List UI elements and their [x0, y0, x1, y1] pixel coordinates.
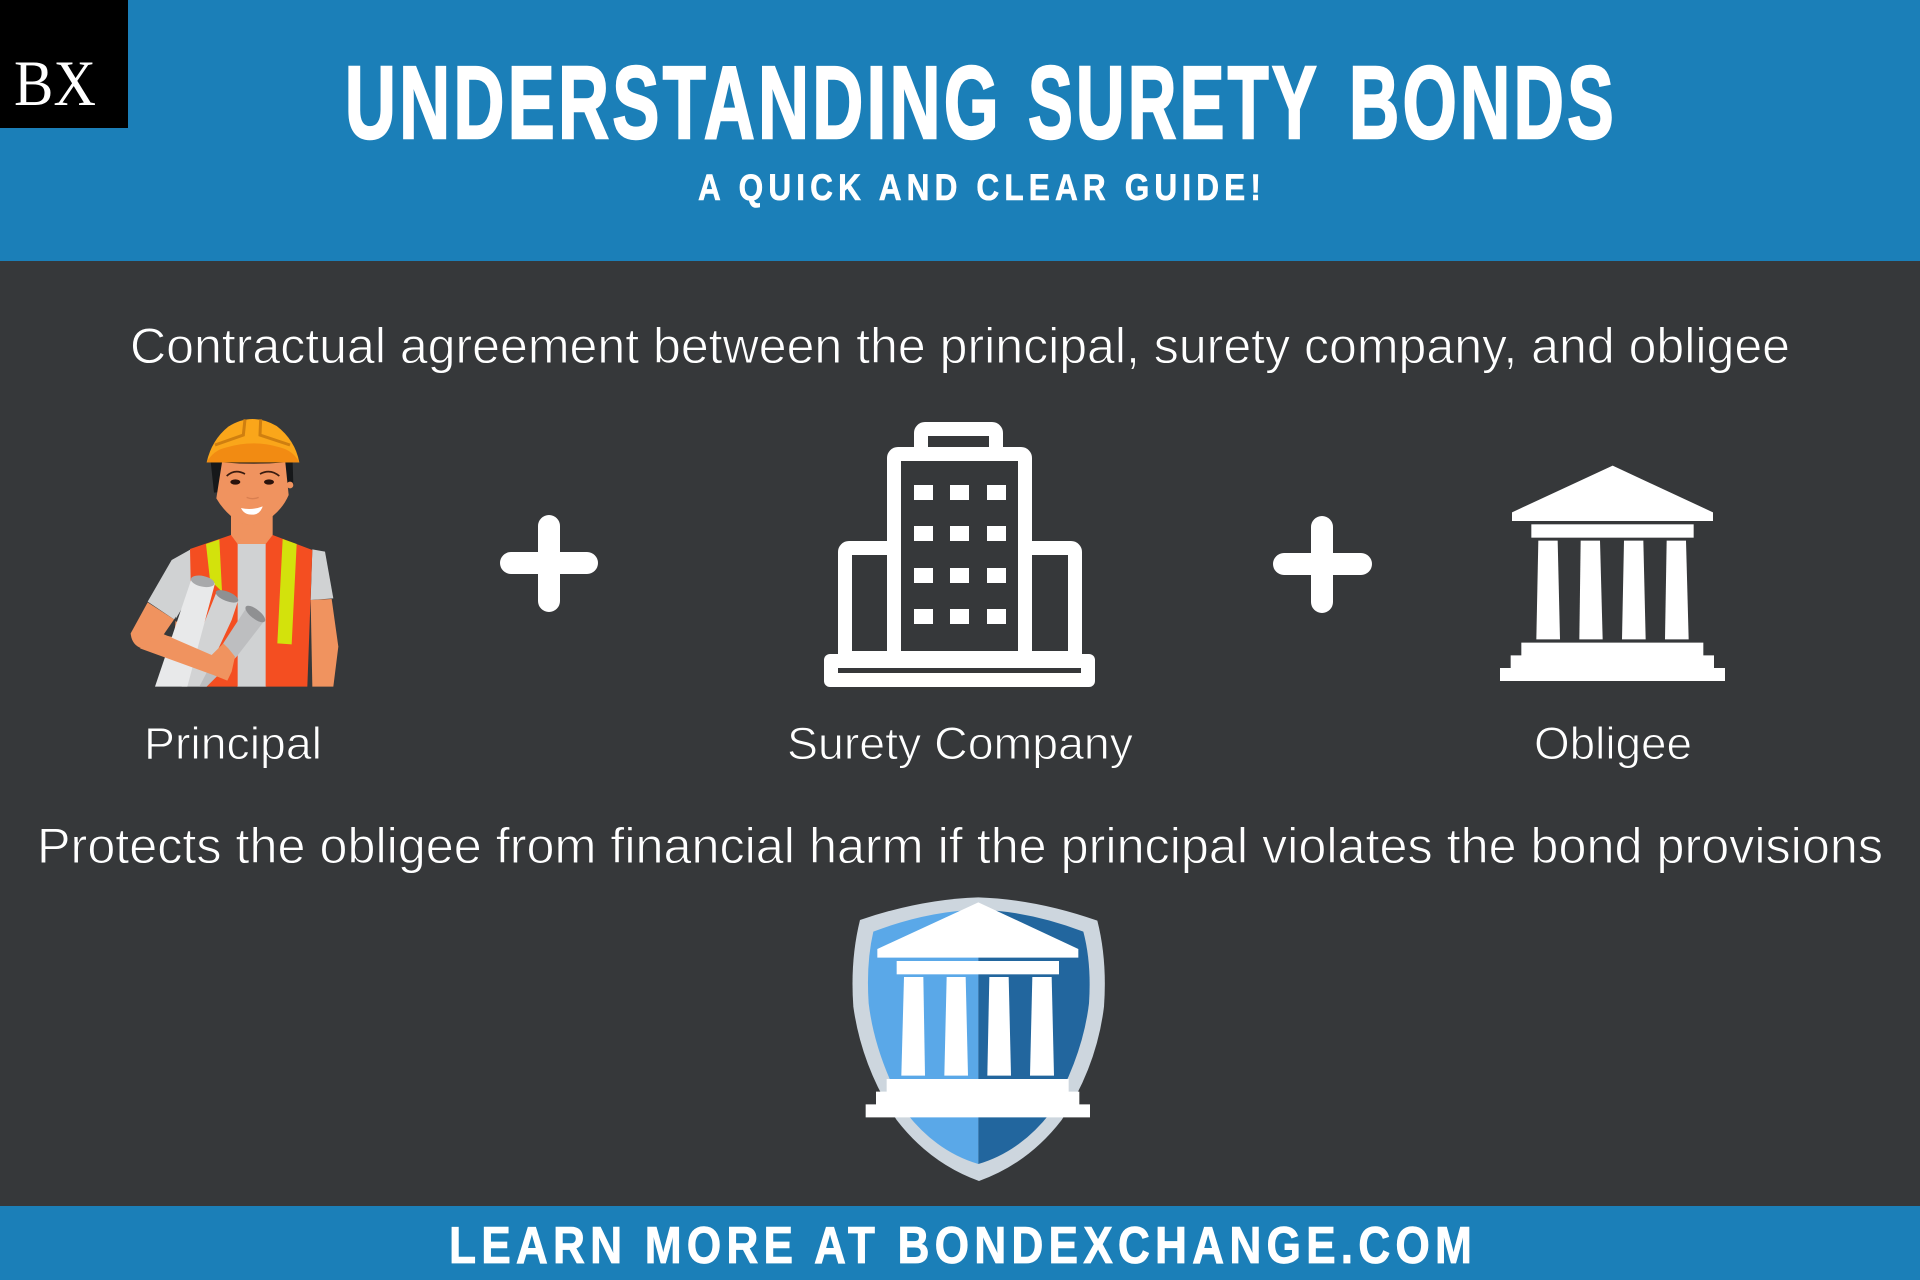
icon: principal worker — [131, 419, 338, 687]
logo: BX — [0, 0, 128, 128]
footer band — [0, 1206, 1920, 1280]
title: SURETY — [1028, 45, 1320, 160]
footer band: LEARN MORE AT BONDEXCHANGE.COM — [449, 1217, 1477, 1275]
icon: obligee temple — [1500, 466, 1725, 681]
label: principal: Principal — [144, 718, 322, 769]
icon: plus — [1284, 527, 1361, 602]
title: UNDERSTANDING — [345, 45, 1002, 160]
label: surety company: Surety Company — [787, 718, 1134, 769]
icon: surety company building — [824, 429, 1095, 687]
intro text: Contractual agreement between the principal, surety company, and obligee — [130, 318, 1790, 374]
subtitle: A QUICK AND CLEAR GUIDE! — [698, 167, 1266, 208]
header band — [0, 0, 1920, 261]
title: BONDS — [1349, 45, 1617, 160]
icon: shield with temple — [852, 897, 1105, 1181]
label: obligee: Obligee — [1534, 718, 1692, 769]
protection text: Protects the obligee from financial harm if the principal violates the bond provisions — [37, 818, 1883, 874]
icon: plus — [511, 526, 587, 601]
logo: BX: BX — [14, 48, 96, 120]
